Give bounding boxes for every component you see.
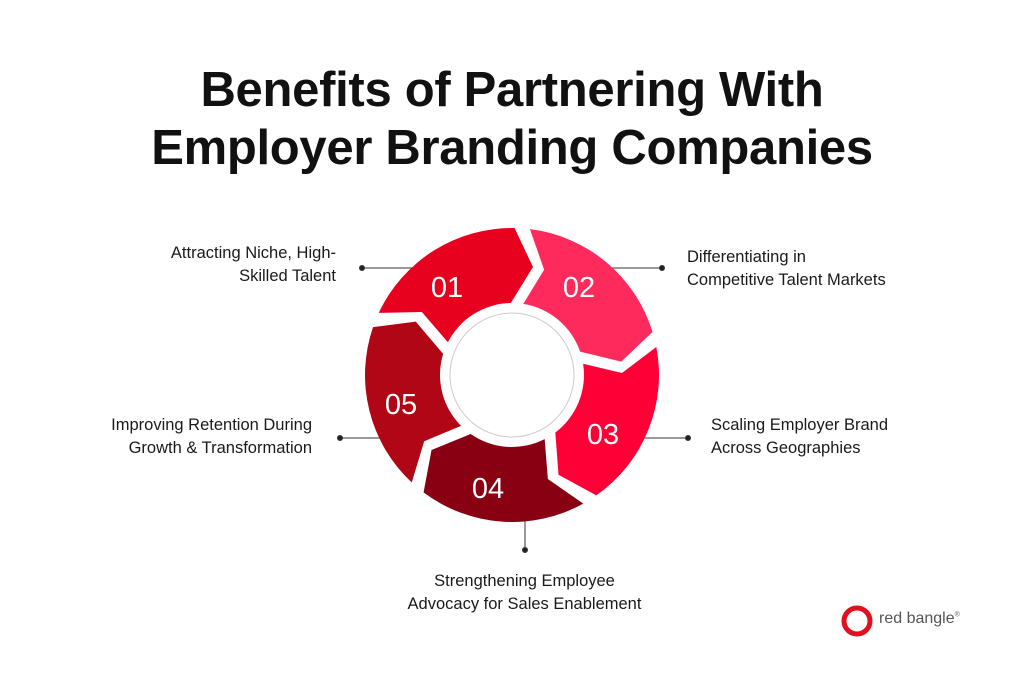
text: 04: Strengthening Employee	[434, 572, 615, 590]
text: 02: Differentiating in	[687, 248, 806, 266]
text: 01	[171, 244, 336, 285]
leader lines	[338, 266, 690, 552]
text: 04	[408, 572, 642, 613]
text: 03: Scaling Employer Brand	[711, 416, 888, 434]
text: 05: Improving Retention During	[111, 416, 312, 434]
text: 02	[687, 248, 886, 289]
title	[151, 63, 873, 175]
text: 01: Attracting Niche, High-	[171, 244, 336, 262]
title: Employer Branding Companies	[151, 121, 873, 175]
numbers	[385, 272, 619, 505]
numbers: 01	[431, 272, 463, 304]
numbers: 04	[472, 473, 504, 505]
text: 05: Growth & Transformation	[129, 439, 312, 457]
text: 03	[711, 416, 888, 457]
text: 02: Competitive Talent Markets	[687, 271, 886, 289]
numbers: 03	[587, 419, 619, 451]
title: Benefits of Partnering With	[200, 63, 824, 117]
text: 03: Across Geographies	[711, 439, 860, 457]
logo text: red bangle®	[879, 610, 960, 627]
text: 05	[111, 416, 312, 457]
segments	[313, 193, 688, 572]
numbers: 02	[563, 272, 595, 304]
numbers: 05	[385, 389, 417, 421]
text: 04: Advocacy for Sales Enablement	[408, 595, 641, 613]
text: 01: Skilled Talent	[239, 267, 336, 285]
logo icon	[844, 608, 870, 634]
